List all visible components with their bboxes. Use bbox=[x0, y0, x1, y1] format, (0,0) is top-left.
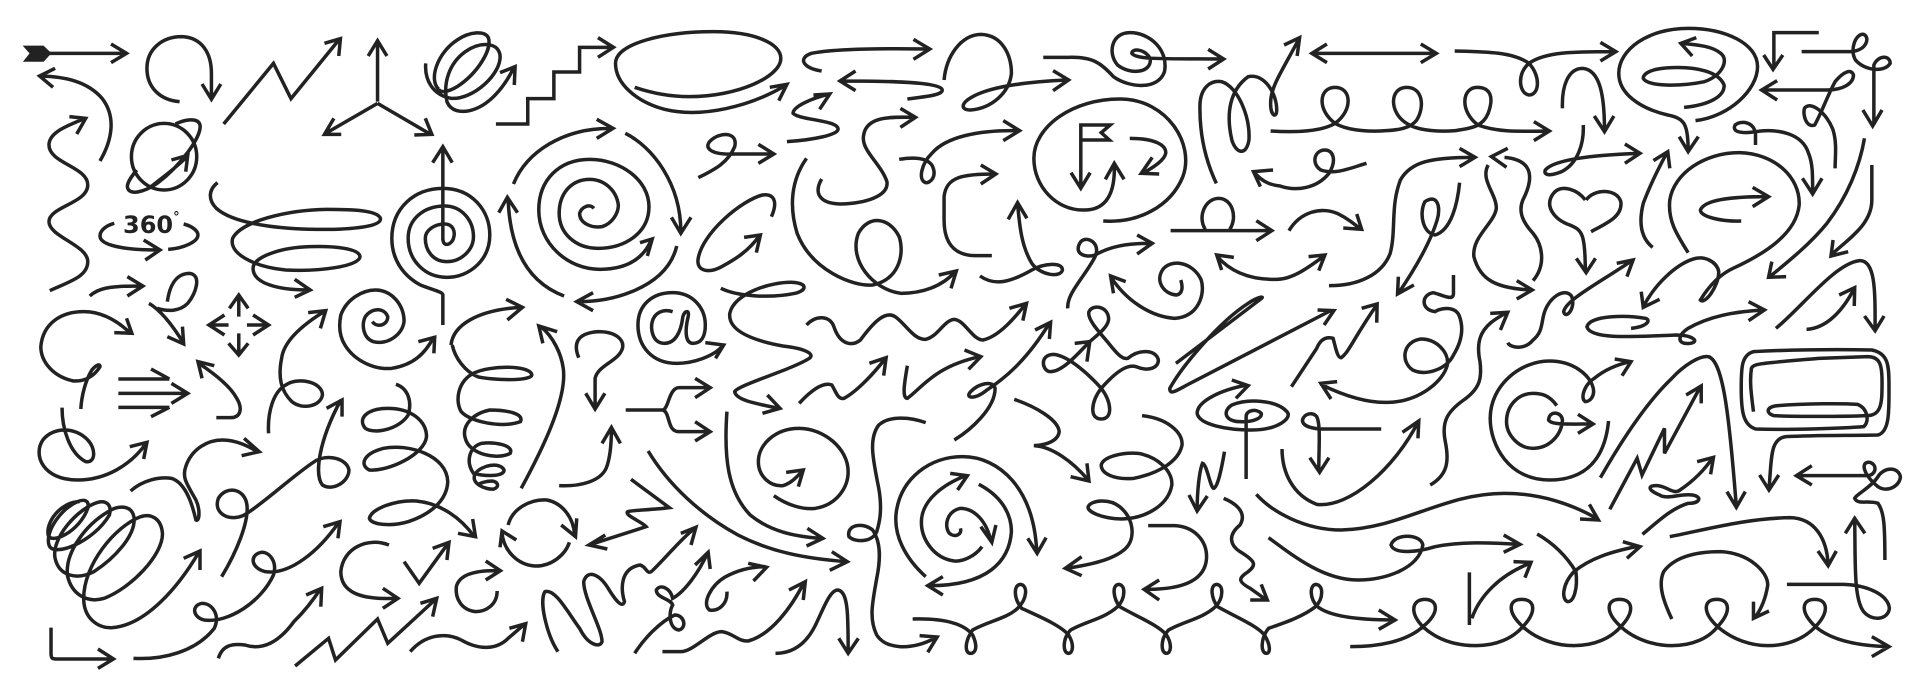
arrow: small S bbox=[787, 94, 838, 142]
arrow: curved left bbox=[40, 68, 111, 161]
arrow: big ring down bbox=[625, 133, 691, 233]
arrow: hook rising bbox=[904, 350, 981, 398]
arrow: long over and down bbox=[1670, 518, 1836, 566]
arrow: loop up bbox=[980, 203, 1062, 282]
arrow: scribble coil bbox=[426, 33, 515, 111]
arrow: up with bottom loop bbox=[1787, 518, 1889, 618]
icon: at sign arrow bbox=[638, 293, 724, 363]
arrow: rising loop bbox=[1508, 260, 1633, 347]
arrow: tall loop bbox=[849, 418, 937, 652]
arrow: big ring left arc bbox=[499, 197, 564, 296]
arrow: sweep right bbox=[1217, 255, 1325, 279]
arrow: fletched straight bbox=[27, 44, 127, 63]
arrow: double spring left bbox=[1065, 416, 1182, 576]
arrow: slim loop diagonal bbox=[954, 322, 1051, 440]
arrow: big ellipse bbox=[616, 32, 787, 112]
arrow: triple lines bbox=[118, 369, 188, 417]
arrow: peak down bbox=[776, 590, 858, 653]
arrow: large sweep 2 bbox=[648, 451, 847, 570]
arrow: large sweep 1 bbox=[726, 412, 823, 546]
arrow: hook right bbox=[1545, 125, 1640, 175]
arrow: double loop up bbox=[1200, 38, 1300, 183]
arrow: four lobed knot bbox=[1043, 307, 1158, 419]
arrow: flat curl bbox=[1587, 302, 1764, 344]
arrow: big ring top arc bbox=[513, 119, 613, 184]
arrow: sweep with curl bbox=[1269, 535, 1520, 580]
arrow: long S right bbox=[1329, 148, 1475, 286]
arrow: check mark bbox=[404, 542, 449, 583]
arrow: wavy vertical bbox=[49, 117, 88, 291]
arrow: long wave sweep bbox=[1256, 493, 1598, 530]
arrow: tall coil bbox=[451, 299, 522, 345]
arrow: curve with hanging loop bbox=[1455, 42, 1616, 95]
arrow: spiral knot right bbox=[1043, 33, 1224, 85]
arrow: tapered coil bbox=[452, 345, 532, 489]
arrow: long zigzag ribbon bbox=[721, 282, 811, 413]
arrow: arch return bbox=[1661, 552, 1769, 619]
arrow: S spring bbox=[362, 384, 476, 537]
arrow: ellipse pin bbox=[1197, 380, 1288, 479]
arrow: small loop rising bbox=[899, 121, 1020, 183]
arrow: ring G outer bbox=[1490, 359, 1631, 480]
panel: bottom-middle arrows bbox=[589, 282, 1395, 653]
arrow: short curved bbox=[90, 277, 143, 296]
panel: top-left arrows bbox=[27, 33, 652, 409]
panel: top-right arrows bbox=[1253, 28, 1890, 347]
arrow: wave low bbox=[410, 624, 526, 652]
panel: bottom-right arrows bbox=[1256, 275, 1900, 657]
arrow: long wave bbox=[807, 303, 1027, 344]
arrow: bracket C bbox=[944, 165, 996, 256]
arrow: small rising bbox=[1807, 288, 1855, 329]
icon: heart arrow bbox=[1550, 188, 1621, 273]
arrow: spiral sweep bbox=[1111, 263, 1202, 318]
arrow: big bubble bbox=[1641, 153, 1799, 307]
panel: bottom-left arrows bbox=[39, 311, 696, 668]
arrow: loop and arch bbox=[41, 312, 132, 409]
arrow: left with knots bbox=[1796, 462, 1900, 560]
arrow: zigzag up bbox=[224, 39, 340, 124]
arrow: double small loops bbox=[133, 522, 340, 659]
arrow: concentric outer bbox=[896, 457, 1046, 577]
arrow: small return bbox=[1130, 138, 1166, 174]
arrow: long slim up bbox=[521, 326, 564, 488]
arrow: long diagonal bbox=[1769, 138, 1864, 277]
arrow: kinked sweep bbox=[1014, 399, 1089, 481]
arrow: small spiral bbox=[340, 290, 435, 369]
arrow: target spiral up bbox=[392, 147, 490, 325]
arrow: small bolt down bbox=[1189, 452, 1224, 511]
arrow: slim up bbox=[1641, 152, 1670, 247]
arrow: bracket return bbox=[1144, 526, 1207, 600]
arrow: zigzag low bbox=[295, 598, 437, 666]
arrow: loop tail up bbox=[268, 311, 326, 433]
arrow: short diagonal bbox=[1831, 165, 1872, 256]
arrow: L corner bbox=[51, 628, 113, 668]
arrow: T down bbox=[1302, 414, 1381, 472]
arrow: sweep up bbox=[1282, 421, 1419, 505]
arrow: speech spiral inner bbox=[1643, 38, 1724, 107]
text: 360 degree label: 360 bbox=[123, 211, 173, 239]
arrow: curl left bbox=[1253, 150, 1367, 189]
arrow: stairs bbox=[496, 38, 613, 124]
arrow: narrow squiggle bbox=[543, 527, 696, 652]
arrow: long S bbox=[818, 108, 916, 204]
arrow: small squiggle down bbox=[1224, 498, 1267, 600]
arrow: big round left bbox=[1321, 275, 1462, 402]
arrow: loop diagonal down bbox=[1398, 183, 1460, 294]
arrow: small wave rising bbox=[799, 358, 886, 403]
arrow: recycle single bbox=[456, 561, 500, 612]
text: 360 degree label: ° bbox=[173, 210, 180, 225]
arrow: connected loop bbox=[131, 438, 259, 520]
arrow: slanted ellipse bbox=[698, 195, 775, 271]
arrow: hook up bbox=[559, 427, 620, 486]
arrow: small loop right bbox=[698, 135, 774, 178]
arrow: steep apex bbox=[1600, 356, 1745, 507]
arrow: flat ribbon spiral bbox=[210, 183, 380, 297]
arrow: speech spiral outer bbox=[1619, 28, 1758, 152]
arrow: small loop sweep down bbox=[1734, 122, 1822, 194]
arrow: wave long rising bbox=[662, 582, 805, 652]
arrow: round loop rising bbox=[39, 408, 147, 480]
arrow: lightning bolt bbox=[1610, 386, 1701, 509]
arrow: ring spiral bbox=[758, 428, 848, 509]
arrow: line with bump bbox=[1171, 198, 1272, 241]
icon: planet arrow bbox=[127, 120, 200, 192]
arrow: right hook bbox=[804, 39, 930, 71]
arrow: three-way bbox=[324, 41, 432, 135]
arrow: wavy rising bbox=[1430, 312, 1508, 485]
arrow: bubble inner bbox=[1700, 187, 1769, 221]
arrow: squiggle rising bbox=[218, 588, 322, 658]
arrow: ring G inner bbox=[1507, 393, 1593, 448]
arrow: round hook bbox=[147, 37, 221, 102]
arrow: concentric inner bbox=[921, 473, 982, 561]
arrow: 360 rotation arcs bbox=[100, 223, 198, 260]
arrow: long looped chain bbox=[913, 584, 1395, 653]
arrow: right angle down bbox=[1764, 33, 1819, 69]
arrow: left with double loop bbox=[1762, 72, 1853, 168]
arrow: small arc bbox=[1289, 211, 1362, 231]
arrow: return hook bbox=[198, 362, 240, 418]
arrow: needle bbox=[1170, 297, 1334, 392]
arrow: big ring bottom arc bbox=[577, 246, 677, 311]
arrow: left hook bbox=[840, 71, 942, 99]
arrow: vase right side bbox=[1491, 148, 1542, 281]
arrow: dense scribble bbox=[48, 500, 200, 628]
arrow: inner spiral bbox=[539, 159, 652, 269]
arrow: flag circle bbox=[1034, 99, 1186, 221]
arrow: three loop chain bbox=[1271, 87, 1549, 141]
arrow: large C with loop bbox=[792, 158, 956, 293]
arrow: loop curve right bbox=[1068, 235, 1152, 308]
arrow: curl and down bbox=[1802, 34, 1890, 126]
arrow: slim loop right bbox=[1537, 534, 1640, 602]
arrow: arch down bbox=[1562, 68, 1614, 132]
panel: top-middle arrows bbox=[577, 32, 1325, 363]
icon: question mark arrow bbox=[576, 332, 623, 409]
arrow: two loops rising bbox=[635, 552, 710, 653]
arrow: rectangle speech spiral bbox=[1741, 350, 1889, 490]
arrow: concentric core bbox=[947, 508, 996, 542]
arrow: small bolt up bbox=[1291, 304, 1377, 387]
arrow: double headed bbox=[1312, 44, 1436, 63]
arrow: thin zig left bbox=[589, 479, 669, 549]
arrow: four-direction cross bbox=[208, 295, 269, 355]
arrow: double loop up bbox=[217, 400, 349, 577]
arrow: vase left side bbox=[1474, 165, 1532, 299]
arrow: figure eight rising bbox=[1642, 457, 1713, 534]
arrow: tall loop right bbox=[944, 34, 1069, 110]
icon: flag arrow bbox=[1071, 125, 1110, 188]
arrow: apex down bbox=[1776, 261, 1884, 331]
arrow: small loop down bbox=[149, 273, 197, 344]
arrow: low loop chain bbox=[1350, 599, 1889, 657]
arrow: vertical and sweep bbox=[1469, 562, 1531, 625]
arrow: loop right short bbox=[706, 563, 767, 610]
arrow: concentric middle bbox=[928, 484, 1011, 595]
arrow: circular pair bbox=[500, 500, 577, 566]
arrow: fork bbox=[626, 378, 710, 441]
arrow: C curve bbox=[341, 542, 398, 608]
